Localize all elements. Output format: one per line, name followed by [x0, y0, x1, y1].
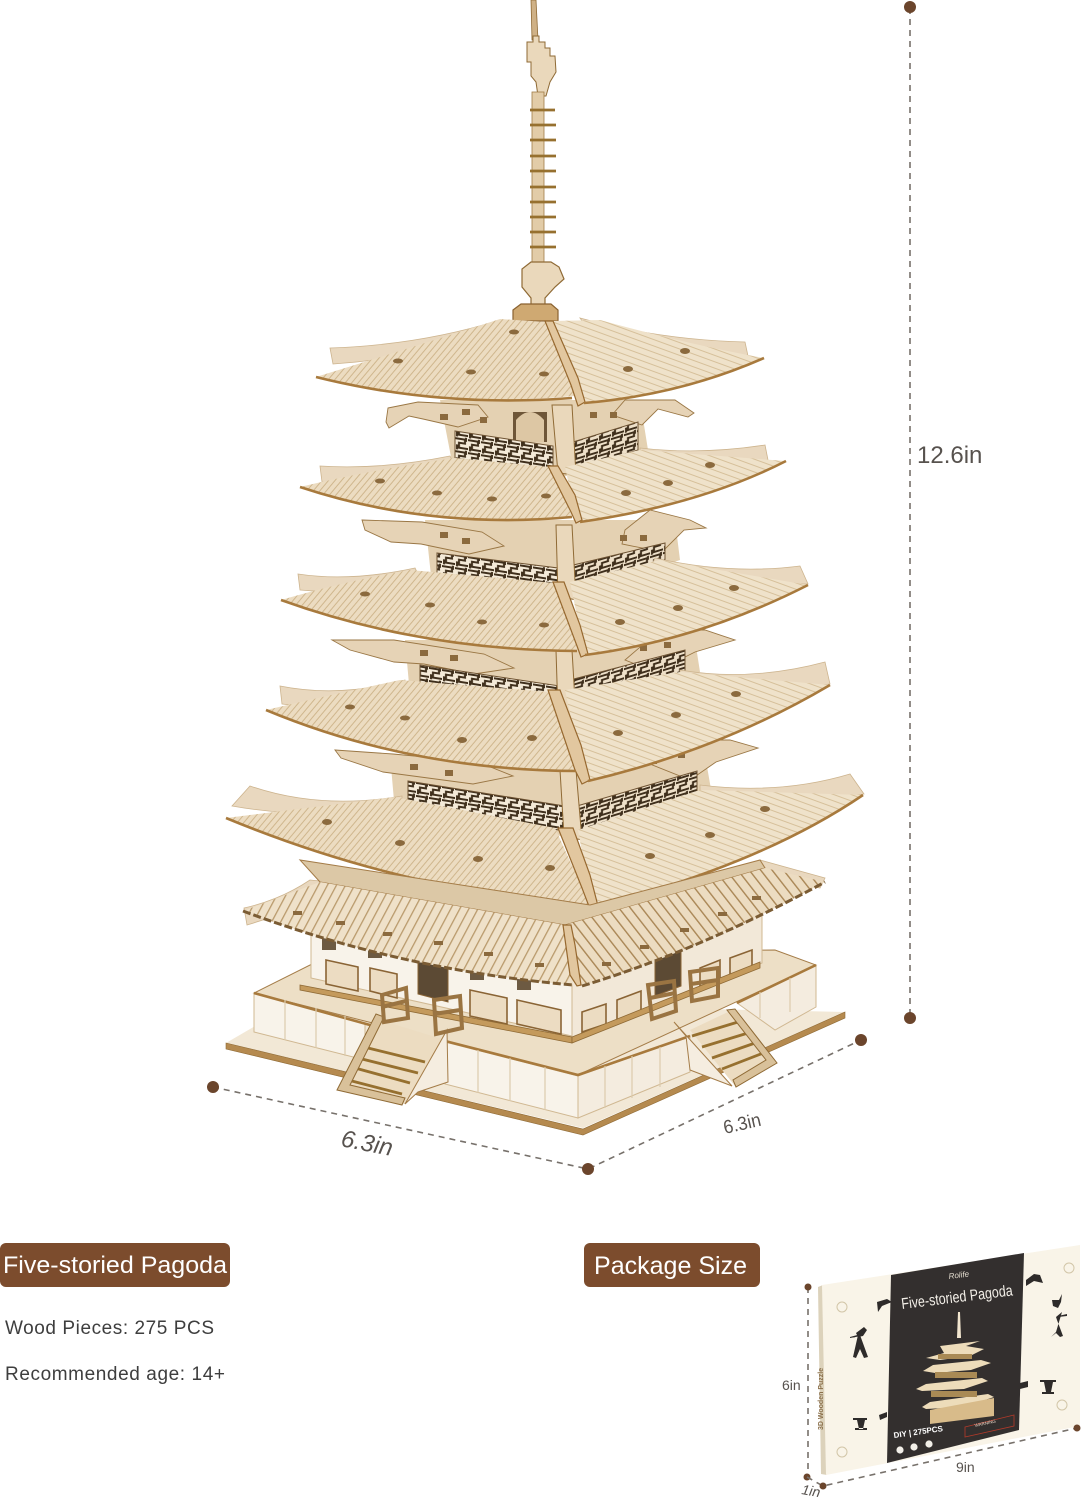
gallery tier 1 [386, 400, 694, 478]
ground plate [226, 1000, 845, 1128]
badge: Five-storied Pagoda [0, 1243, 230, 1287]
box front [822, 1245, 1080, 1475]
box pagoda image [916, 1312, 994, 1424]
plinth right wall [578, 1036, 690, 1118]
package width dimension [807, 1424, 1080, 1490]
base dimension lines [207, 1034, 867, 1175]
box side [818, 1285, 827, 1475]
spine text: 3D Wooden Puzzle [818, 1368, 825, 1430]
stairs right [648, 968, 777, 1087]
gallery tier 3 [332, 630, 735, 718]
windows [322, 938, 752, 1034]
roof tier 4 [300, 445, 786, 523]
box badges [896, 1440, 933, 1454]
roof tier 2 [266, 662, 830, 784]
roof tier 5 (top) [316, 318, 764, 406]
height label: 12.6in [917, 442, 982, 469]
building front wall [311, 928, 572, 1036]
box DIY label: DIY | 275PCS [893, 1424, 944, 1440]
roof tier 3 [281, 558, 808, 657]
black sleeve [887, 1253, 1024, 1463]
spire [513, 0, 564, 321]
badge: Five-storied Pagoda: Five-storied Pagoda [3, 1252, 227, 1279]
box warning: WARNING [974, 1418, 997, 1428]
box title: Five-storied Pagoda [900, 1282, 1014, 1313]
plinth left wall [254, 993, 365, 1060]
lower roof [243, 860, 825, 986]
stairs left [337, 988, 462, 1105]
plinth front wall [445, 1042, 578, 1118]
plinth top [254, 950, 816, 1075]
width label: 6.3in [339, 1125, 395, 1162]
gallery tier 2 [362, 510, 706, 600]
pagoda model [226, 0, 864, 1135]
recommended age text: Recommended age: 14+ [5, 1364, 225, 1385]
box warning [965, 1415, 1014, 1437]
wood pieces text: Wood Pieces: 275 PCS [5, 1318, 214, 1339]
label 9in: 9in [956, 1459, 975, 1475]
package box [818, 1245, 1080, 1475]
roof tier 1 (large) [226, 774, 864, 909]
depth label: 6.3in [721, 1110, 763, 1139]
temple base [226, 906, 845, 1135]
height dimension line [904, 1, 916, 1024]
brand: Rolife [948, 1269, 970, 1281]
box ornaments [837, 1263, 1074, 1457]
gallery tier 4 [335, 740, 758, 840]
badge: Package Size [584, 1243, 760, 1287]
label 6in: 6in [782, 1377, 801, 1393]
building right wall [572, 906, 762, 1038]
box illustrations [850, 1274, 1067, 1430]
badge: Package Size: Package Size [594, 1252, 747, 1280]
plinth back right wall [737, 965, 816, 1030]
package height dimension [804, 1284, 812, 1480]
